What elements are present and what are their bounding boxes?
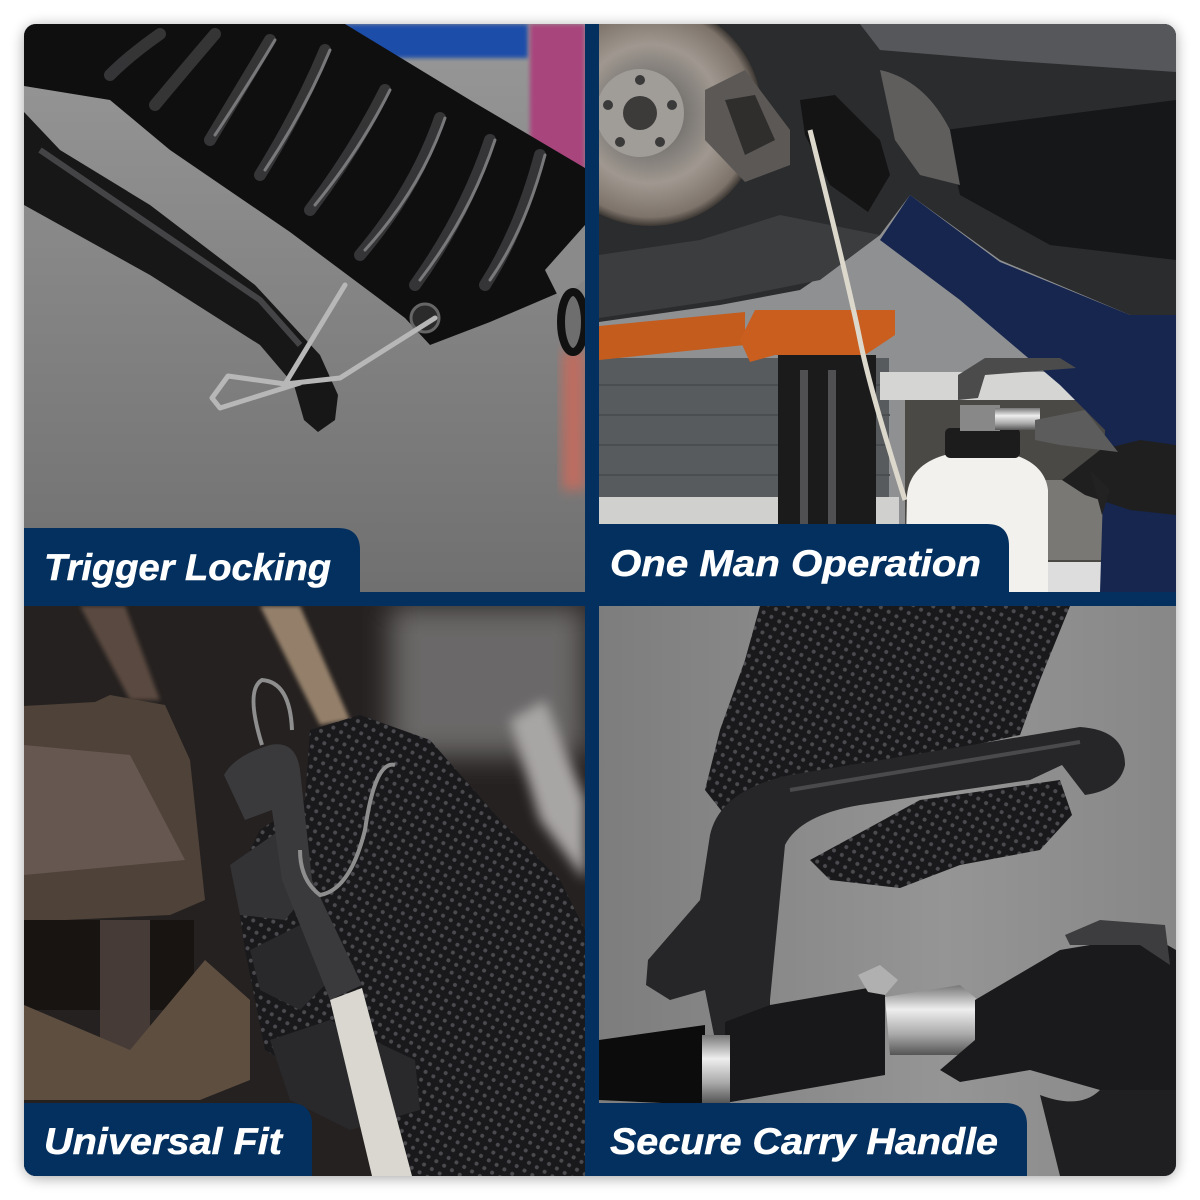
label: universal fit: Universal Fit	[44, 1121, 284, 1162]
pump body	[599, 965, 978, 1105]
gloved hand	[800, 95, 890, 212]
panel: trigger locking	[24, 24, 585, 592]
label: one man operation	[585, 524, 1009, 592]
trigger lever	[24, 112, 338, 432]
panel: one man operation	[599, 24, 1176, 592]
upper glove	[705, 606, 1070, 828]
black grip	[24, 24, 585, 352]
mechanic arm	[880, 195, 1176, 592]
gun trigger	[940, 935, 1176, 1090]
brake caliper	[24, 695, 250, 1100]
label: trigger locking	[24, 528, 360, 592]
panel: universal fit	[24, 606, 585, 1176]
caliper	[705, 70, 790, 182]
label: one man operation: One Man Operation	[610, 543, 981, 584]
label: secure carry handle: Secure Carry Handle	[610, 1121, 998, 1162]
hose	[810, 130, 905, 500]
brake disc	[599, 24, 759, 226]
gloved hand	[230, 715, 585, 1176]
underbody	[599, 24, 1176, 322]
bleed hose	[224, 680, 412, 1176]
bottle and pump	[905, 358, 1118, 592]
panel: secure carry handle	[599, 606, 1176, 1176]
label: secure carry handle	[585, 1103, 1027, 1176]
carry handle	[646, 727, 1125, 1040]
label: trigger locking: Trigger Locking	[44, 547, 331, 588]
label: universal fit	[24, 1103, 312, 1176]
orange lift	[599, 310, 895, 525]
wire lock clip	[212, 285, 435, 408]
